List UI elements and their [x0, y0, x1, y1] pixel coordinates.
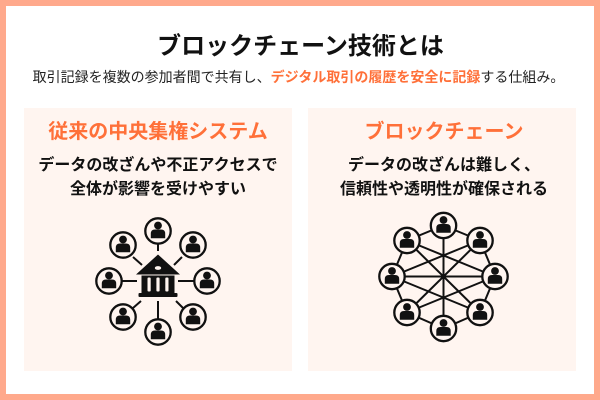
- spokes: [122, 244, 194, 319]
- heading: blockchain: ブロックチェーン: [364, 121, 524, 143]
- description: centralized system: 全体が影響を受けやすい: [70, 180, 246, 198]
- icon: bank building: [136, 254, 180, 297]
- description: blockchain: 信頼性や透明性が確保される: [340, 180, 548, 198]
- description: blockchain: [340, 156, 548, 198]
- description: centralized system: データの改ざんや不正アクセスで: [38, 157, 278, 174]
- user nodes: [96, 218, 220, 345]
- description: blockchain: データの改ざんは難しく、: [348, 157, 540, 174]
- diagram: blockchain mesh network: [379, 213, 508, 341]
- subtitle text: 取引記録を複数の参加者間で共有し、デジタル取引の履歴を安全に記録する仕組み。: [33, 69, 564, 85]
- heading: centralized system: 従来の中央集権システム: [48, 121, 268, 143]
- mesh links: [392, 226, 495, 328]
- diagram: centralized network: [96, 218, 220, 345]
- description: centralized system: [38, 156, 278, 198]
- panel: blockchain: [308, 108, 576, 371]
- peer nodes: [379, 213, 508, 341]
- panel: centralized system: [24, 108, 292, 371]
- title: ブロックチェーン技術とは: [157, 33, 444, 60]
